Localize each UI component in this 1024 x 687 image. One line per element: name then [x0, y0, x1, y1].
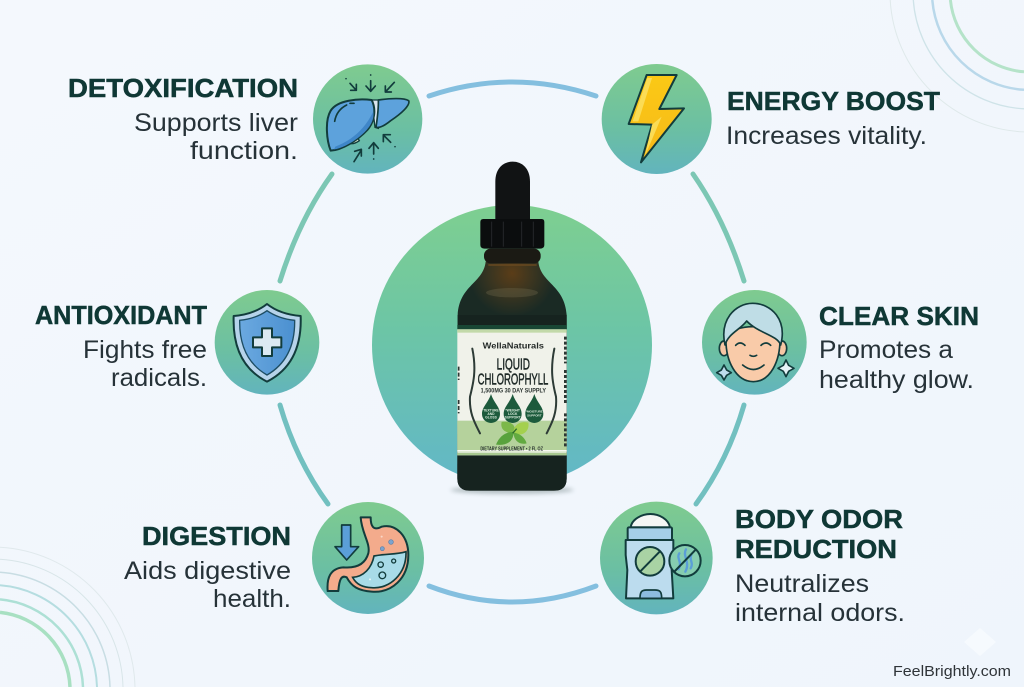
product label: AND [487, 412, 495, 416]
heading: ANTIOXIDANT [35, 300, 207, 330]
description: Increases vitality. [726, 122, 927, 150]
product label: *MOISTURE [526, 410, 543, 414]
connecting ring arcs [280, 82, 744, 602]
icon: deodorant stick [600, 502, 713, 614]
bottle glass [457, 262, 567, 491]
heading: REDUCTION [735, 534, 897, 564]
node: antioxidant [35, 290, 319, 395]
icon: stomach [312, 502, 424, 614]
icon: liver [313, 64, 422, 174]
label title: LIQUID [497, 356, 530, 373]
label drops [482, 394, 543, 423]
description: function. [190, 137, 298, 165]
decorative rings top right [890, 0, 1024, 132]
description: Aids digestive [124, 557, 291, 585]
product label: GLOSS [485, 416, 498, 420]
heading: CLEAR SKIN [819, 301, 979, 331]
label brand: WellaNaturals [483, 341, 544, 351]
product label: *WEIGHT [505, 408, 520, 412]
description: Neutralizes [735, 570, 869, 598]
dropper collar [480, 219, 544, 249]
node: energy boost [602, 64, 940, 174]
heading: BODY ODOR [735, 504, 903, 534]
description [735, 570, 905, 627]
label side print [561, 337, 569, 448]
description: Fights free [83, 336, 207, 364]
product label: SUPPORT [505, 416, 521, 420]
product label: LOCK [508, 412, 518, 416]
description: radicals. [111, 364, 207, 392]
node: digestion [124, 502, 424, 614]
label silhouette lines [470, 349, 556, 433]
product label [457, 329, 567, 455]
description [134, 109, 298, 165]
dropper bulb [495, 162, 530, 222]
icon: shield [215, 290, 319, 395]
description: health. [213, 585, 291, 613]
product label: CHLOROPHYLL [478, 372, 548, 389]
label footer: DIETARY SUPPLEMENT • 2 FL OZ [480, 446, 543, 452]
description: internal odors. [735, 599, 905, 627]
decorative rings bottom left [0, 547, 135, 687]
faint watermark diamond [964, 628, 996, 656]
product label: TEXTURE [483, 408, 500, 412]
description: healthy glow. [819, 366, 974, 394]
description [83, 336, 207, 392]
central green circle [372, 205, 652, 485]
icon: smiling face [702, 290, 807, 395]
node: clear skin [702, 290, 979, 395]
node: detoxification [68, 64, 422, 174]
product label: SUPPORT [527, 414, 542, 418]
icon: lightning bolt [602, 64, 712, 174]
product label: 1,500MG 30 DAY SUPPLY [481, 388, 546, 395]
watermark: FeelBrightly.com [893, 664, 1011, 680]
heading: DETOXIFICATION [68, 73, 298, 103]
description: Supports liver [134, 109, 298, 137]
heading: DIGESTION [142, 521, 291, 551]
node: body odor reduction [600, 502, 905, 627]
heading [735, 504, 903, 564]
heading: ENERGY BOOST [727, 86, 940, 116]
description: Promotes a [819, 336, 953, 364]
description [819, 336, 974, 394]
product bottle [450, 162, 574, 494]
description [124, 557, 291, 613]
mint leaves [496, 422, 529, 445]
bottle shadow [450, 486, 574, 494]
